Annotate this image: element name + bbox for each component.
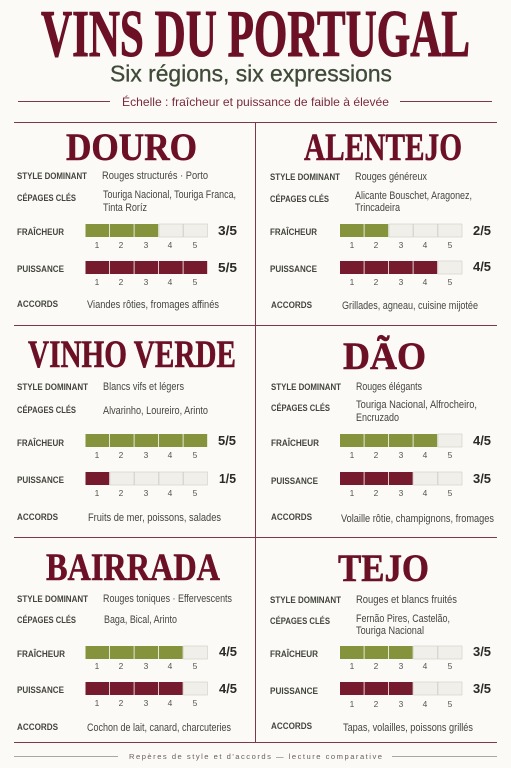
puissance gauge 3/5: 1	[350, 488, 355, 498]
puissance gauge 4/5: 4/5	[473, 259, 491, 274]
style dominant: STYLE DOMINANT	[17, 171, 87, 182]
accords: Viandes rôties, fromages affinés	[87, 299, 220, 311]
puissance gauge 5/5	[17, 260, 237, 287]
panel: Bairrada	[17, 546, 237, 734]
fraîcheur gauge 5/5: 3	[144, 450, 149, 460]
heading: Tejo: TEJO	[338, 547, 429, 590]
accords: ACCORDS	[271, 300, 312, 311]
fraîcheur gauge 2/5: 5	[448, 240, 453, 250]
cépages clés: CÉPAGES CLÉS	[270, 615, 330, 627]
fraîcheur gauge 3/5: 3/5	[473, 644, 491, 659]
cépages clés: Trincadeira	[355, 202, 400, 214]
cépages clés: CÉPAGES CLÉS	[17, 614, 76, 626]
cépages clés	[17, 189, 236, 214]
fraîcheur gauge 2/5: 3	[399, 240, 404, 250]
puissance gauge 1/5: 5	[193, 488, 198, 498]
cépages clés: Alicante Bouschet, Aragonez,	[355, 190, 472, 202]
panel: Alentejo	[270, 126, 491, 312]
panel: Vinho Verde	[17, 333, 236, 524]
fraîcheur gauge 4/5: 4	[423, 450, 428, 460]
fraîcheur gauge 3/5: 2	[374, 661, 379, 671]
fraîcheur gauge 3/5: 5	[193, 240, 198, 250]
cépages clés: Encruzado	[356, 412, 399, 424]
fraîcheur gauge 3/5: 3/5	[218, 223, 237, 238]
fraîcheur gauge 3/5: 2	[119, 240, 124, 250]
puissance gauge 3/5: 1	[350, 699, 355, 709]
puissance gauge 4/5: 2	[374, 277, 379, 287]
accords	[17, 299, 220, 311]
fraîcheur gauge 5/5: 4	[168, 450, 173, 460]
cépages clés	[270, 613, 450, 637]
fraîcheur gauge 3/5: 4	[423, 661, 428, 671]
puissance gauge 3/5: 4	[423, 699, 428, 709]
accords	[17, 512, 222, 524]
style dominant: Rouges structurés · Porto	[102, 170, 208, 182]
fraîcheur gauge 2/5: 4	[423, 240, 428, 250]
fraîcheur gauge 3/5: 1	[350, 661, 355, 671]
fraîcheur gauge 3/5: 1	[95, 240, 100, 250]
fraîcheur gauge 4/5: FRAÎCHEUR	[17, 648, 65, 660]
puissance gauge 3/5: PUISSANCE	[270, 686, 319, 697]
puissance gauge 4/5: 2	[119, 698, 124, 708]
puissance gauge 5/5: 4	[168, 277, 173, 287]
fraîcheur gauge 4/5: 3	[399, 450, 404, 460]
style dominant	[17, 593, 232, 605]
style dominant: Rouges toniques · Effervescents	[103, 593, 232, 605]
puissance gauge 4/5: 4	[423, 277, 428, 287]
style dominant: STYLE DOMINANT	[17, 382, 88, 393]
style dominant: STYLE DOMINANT	[271, 382, 341, 393]
fraîcheur gauge 5/5: 1	[95, 450, 100, 460]
puissance gauge 3/5: 3	[399, 699, 404, 709]
panel: Dão	[271, 334, 495, 525]
heading: Alentejo: ALENTEJO	[304, 126, 462, 169]
cépages clés	[270, 190, 472, 214]
accords	[271, 512, 495, 525]
accords: Grillades, agneau, cuisine mijotée	[342, 300, 478, 312]
style dominant: Blancs vifs et légers	[103, 381, 185, 393]
puissance gauge 1/5: 1/5	[219, 471, 236, 486]
cépages clés: Touriga Nacional, Alfrocheiro,	[356, 399, 477, 411]
cépages clés	[271, 399, 477, 424]
puissance gauge 3/5: 2	[374, 488, 379, 498]
accords	[271, 721, 474, 734]
fraîcheur gauge 3/5: 3	[399, 661, 404, 671]
cépages clés: CÉPAGES CLÉS	[17, 192, 76, 204]
puissance gauge 4/5: 3	[399, 277, 404, 287]
style dominant: Rouges généreux	[355, 171, 427, 183]
puissance gauge 4/5: 1	[95, 698, 100, 708]
fraîcheur gauge 3/5: FRAÎCHEUR	[270, 648, 318, 660]
heading: Vinho Verde: VINHO VERDE	[28, 333, 236, 376]
puissance gauge 3/5: 3/5	[473, 681, 491, 696]
cépages clés: CÉPAGES CLÉS	[271, 402, 330, 414]
style dominant: STYLE DOMINANT	[270, 595, 341, 606]
fraîcheur gauge 4/5: 5	[193, 661, 198, 671]
style dominant	[17, 381, 185, 393]
accords: ACCORDS	[17, 722, 58, 733]
puissance gauge 3/5: 3	[399, 488, 404, 498]
style dominant	[270, 594, 458, 606]
fraîcheur gauge 4/5	[17, 644, 237, 671]
fraîcheur gauge 4/5: 4/5	[473, 433, 491, 448]
fraîcheur gauge 2/5: 2	[374, 240, 379, 250]
fraîcheur gauge 4/5: 4/5	[219, 644, 237, 659]
fraîcheur gauge 4/5: 5	[448, 450, 453, 460]
puissance gauge 3/5: 3/5	[473, 471, 491, 486]
fraîcheur gauge 4/5: 1	[350, 450, 355, 460]
fraîcheur gauge 4/5: 4	[168, 661, 173, 671]
fraîcheur gauge 4/5: 2	[374, 450, 379, 460]
style dominant: Rouges et blancs fruités	[356, 594, 458, 606]
fraîcheur gauge 4/5: 2	[119, 661, 124, 671]
puissance gauge 4/5: 5	[193, 698, 198, 708]
puissance gauge 5/5: 5	[193, 277, 198, 287]
cépages clés: Baga, Bical, Arinto	[104, 614, 177, 626]
style dominant	[271, 381, 422, 393]
puissance gauge 4/5: 4	[168, 698, 173, 708]
fraîcheur gauge 5/5: 2	[119, 450, 124, 460]
cépages clés	[17, 404, 208, 417]
puissance gauge 3/5: 5	[448, 488, 453, 498]
puissance gauge 4/5	[17, 681, 237, 708]
cépages clés: Alvarinho, Loureiro, Arinto	[103, 405, 208, 417]
puissance gauge 4/5: PUISSANCE	[17, 685, 64, 696]
puissance gauge 3/5	[270, 681, 491, 709]
accords: Tapas, volailles, poissons grillés	[343, 722, 474, 734]
puissance gauge 3/5: 4	[423, 488, 428, 498]
accords: Fruits de mer, poissons, salades	[88, 512, 222, 524]
accords: ACCORDS	[17, 299, 58, 310]
accords: ACCORDS	[271, 512, 312, 523]
puissance gauge 1/5: 2	[119, 488, 124, 498]
puissance gauge 1/5	[17, 471, 236, 498]
puissance gauge 3/5: 5	[448, 699, 453, 709]
fraîcheur gauge 3/5: 3	[144, 240, 149, 250]
style dominant: STYLE DOMINANT	[17, 594, 88, 605]
accords: ACCORDS	[17, 512, 58, 523]
panel: Tejo	[270, 547, 491, 734]
accords	[17, 722, 231, 734]
puissance gauge 1/5: 1	[95, 488, 100, 498]
cépages clés: Tinta Roríz	[103, 202, 147, 214]
cépages clés: Touriga Nacional	[356, 625, 424, 637]
fraîcheur gauge 2/5: 2/5	[473, 223, 491, 238]
fraîcheur gauge 2/5	[270, 223, 491, 250]
fraîcheur gauge 5/5: FRAÎCHEUR	[17, 437, 64, 449]
cépages clés: Touriga Nacional, Touriga Franca,	[103, 189, 236, 201]
puissance gauge 5/5: 1	[95, 277, 100, 287]
style dominant	[17, 170, 208, 182]
puissance gauge 5/5: 2	[119, 277, 124, 287]
puissance gauge 5/5: 3	[144, 277, 149, 287]
puissance gauge 3/5: 2	[374, 699, 379, 709]
fraîcheur gauge 2/5: FRAÎCHEUR	[270, 226, 317, 238]
fraîcheur gauge 4/5: 1	[95, 661, 100, 671]
fraîcheur gauge 2/5: 1	[350, 240, 355, 250]
fraîcheur gauge 5/5: 5/5	[218, 433, 236, 448]
fraîcheur gauge 5/5: 5	[193, 450, 198, 460]
style dominant: STYLE DOMINANT	[270, 172, 340, 183]
fraîcheur gauge 3/5: 5	[448, 661, 453, 671]
puissance gauge 5/5: PUISSANCE	[17, 264, 64, 275]
panel: Douro	[17, 126, 237, 311]
heading: Douro: DOURO	[66, 126, 197, 169]
fraîcheur gauge 5/5	[17, 433, 236, 460]
fraîcheur gauge 4/5	[271, 433, 491, 460]
puissance gauge 4/5: PUISSANCE	[270, 264, 317, 275]
accords: Cochon de lait, canard, charcuteries	[87, 722, 231, 734]
puissance gauge 4/5: 4/5	[219, 681, 237, 696]
puissance gauge 3/5	[271, 471, 491, 498]
cépages clés: CÉPAGES CLÉS	[270, 193, 329, 205]
cépages clés: CÉPAGES CLÉS	[17, 404, 76, 416]
fraîcheur gauge 4/5: FRAÎCHEUR	[271, 437, 319, 449]
cépages clés	[17, 614, 177, 626]
accords: ACCORDS	[271, 721, 312, 732]
fraîcheur gauge 3/5: FRAÎCHEUR	[17, 226, 64, 238]
cépages clés: Fernão Pires, Castelão,	[356, 613, 450, 625]
puissance gauge 4/5: 3	[144, 698, 149, 708]
puissance gauge 3/5: PUISSANCE	[271, 476, 318, 487]
puissance gauge 4/5: 5	[448, 277, 453, 287]
subtitle: Six régions, six expressions	[110, 60, 392, 86]
puissance gauge 4/5: 1	[350, 277, 355, 287]
fraîcheur gauge 4/5: 3	[144, 661, 149, 671]
style dominant	[270, 171, 427, 183]
scale note: Échelle : fraîcheur et puissance de faible à élevée	[122, 95, 389, 109]
puissance gauge 1/5: PUISSANCE	[17, 475, 64, 486]
puissance gauge 4/5	[270, 259, 491, 287]
fraîcheur gauge 3/5	[17, 223, 237, 250]
puissance gauge 5/5: 5/5	[218, 260, 237, 275]
heading: Bairrada: BAIRRADA	[46, 546, 220, 589]
puissance gauge 1/5: 3	[144, 488, 149, 498]
style dominant: Rouges élégants	[356, 381, 422, 393]
fraîcheur gauge 3/5	[270, 644, 491, 671]
heading: Dão: DÃO	[343, 334, 426, 378]
fraîcheur gauge 3/5: 4	[168, 240, 173, 250]
puissance gauge 1/5: 4	[168, 488, 173, 498]
footer: Repères de style et d'accords — lecture comparative	[129, 752, 382, 761]
accords	[271, 300, 478, 312]
